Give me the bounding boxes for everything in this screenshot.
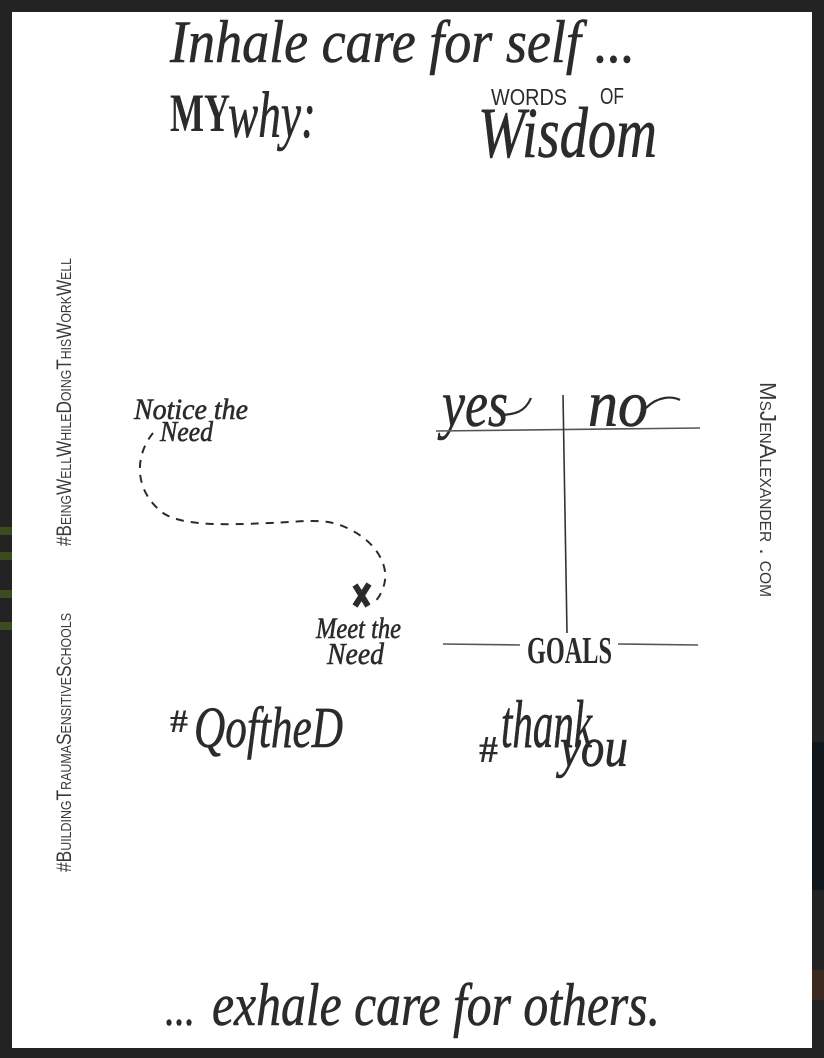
heading: Words of Wisdom: Wisdom xyxy=(478,93,657,173)
closing line: exhale care for others: exhale care for others. xyxy=(212,972,660,1038)
vertical hashtag: Being Well While Doing This Work Well: #BeingWellWhileDoingThisWorkWell xyxy=(53,258,76,546)
heading: Goals with rules: GOALS xyxy=(527,630,612,672)
heading: My why xyxy=(170,79,316,152)
hashtag: thank you xyxy=(479,686,628,779)
dashed path from notice to meet xyxy=(140,433,385,603)
vertical credit: MsJenAlexander.com: MsJenAlexander . com xyxy=(755,382,781,597)
vertical hashtag: Building Trauma Sensitive Schools: #BuildingTraumaSensitiveSchools xyxy=(53,613,76,872)
yes / no T-chart xyxy=(436,368,700,633)
chart heading: yes: yes xyxy=(437,368,508,441)
hashtag: thank you: you xyxy=(556,717,628,779)
heading: Words of Wisdom: OF xyxy=(600,83,624,109)
hashtag: thank you: thank xyxy=(501,686,593,762)
background fragments peeking around the sheet xyxy=(0,527,824,1000)
heading: Words of Wisdom: WORDS xyxy=(491,84,567,110)
hashtag: Q of the D xyxy=(170,695,343,760)
hashtag: thank you: # xyxy=(479,729,498,771)
label: Notice the Need xyxy=(133,393,248,448)
title: Inhale care for self: Inhale care for self ... xyxy=(169,9,635,75)
label: Notice the Need: Need xyxy=(159,416,213,448)
heading: My why: why: xyxy=(228,79,316,152)
label: Meet the Need xyxy=(315,612,401,671)
label: Meet the Need: Meet the xyxy=(315,612,401,645)
closing line: exhale care for others: ... xyxy=(165,980,195,1036)
hashtag: Q of the D: QoftheD xyxy=(194,695,343,760)
chart heading: no: no xyxy=(588,368,648,441)
heading: My why: MY xyxy=(170,83,230,143)
icon: X mark xyxy=(355,584,369,606)
label: Meet the Need: Need xyxy=(326,636,384,671)
hashtag: Q of the D: # xyxy=(170,704,189,740)
label: Notice the Need: Notice the xyxy=(133,393,248,426)
